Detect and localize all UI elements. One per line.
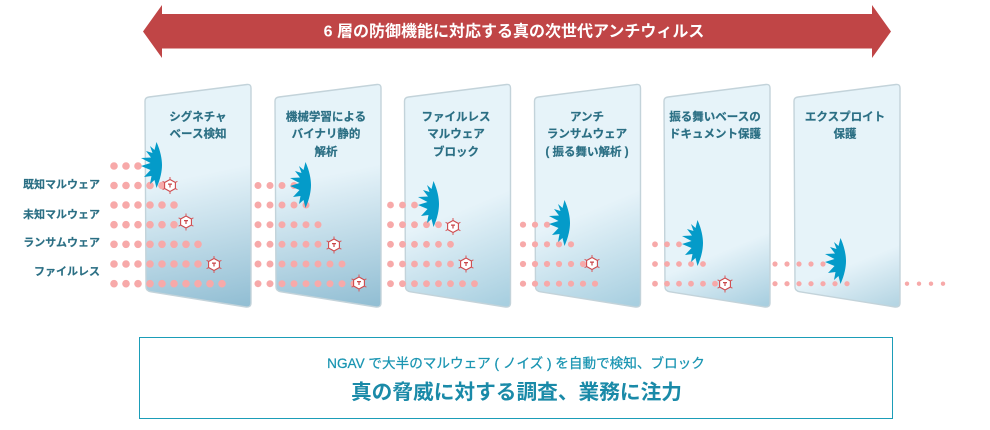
virus icons	[163, 177, 732, 292]
threat dots: passing through	[905, 282, 945, 286]
threat dots: before panel 5	[652, 241, 718, 287]
summary line 2: 真の脅威に対する調査、業務に注力	[351, 380, 682, 404]
panel 2: machine learning static analysis: バイナリ静的	[292, 126, 360, 140]
panel 4: anti-ransomware: ランサムウェア	[547, 128, 627, 140]
label: unknown malware: 未知マルウェア	[23, 207, 100, 221]
panel 3: fileless malware block	[404, 84, 510, 307]
panel 4: anti-ransomware	[534, 84, 640, 307]
panel 6: exploit protection: エクスプロイト	[805, 110, 885, 124]
panel 3: fileless malware block: ブロック	[433, 144, 479, 158]
panel 1: signature-based detection: シグネチャ	[169, 110, 227, 124]
panel 3: fileless malware block: マルウェア	[427, 128, 485, 140]
block burst: panel 1	[141, 142, 162, 188]
summary line 1: NGAV で大半のマルウェア ( ノイズ ) を自動で検知、ブロック	[327, 355, 705, 371]
panel 1: signature-based detection	[145, 84, 251, 307]
summary box	[140, 338, 892, 418]
icon: virus, past panel 5	[718, 276, 732, 292]
threat dots: before panel 4	[520, 222, 598, 287]
panel 2: machine learning static analysis: 機械学習による	[286, 110, 366, 124]
threat dots: before panel 1	[110, 162, 226, 288]
threat dots: before panel 6	[772, 261, 850, 286]
panel 2: machine learning static analysis	[275, 84, 381, 307]
panel 5: behavior-based document protection: ドキュメント保護	[669, 126, 761, 140]
panel 5: behavior-based document protection	[664, 84, 770, 307]
row labels	[23, 177, 100, 278]
block burst: panel 5	[682, 220, 703, 266]
icon: virus, known malware	[163, 177, 177, 194]
icon: virus, past panel 2 upper	[327, 236, 341, 254]
icon: virus, fileless	[207, 256, 221, 273]
banner title: 6 層の防御機能に対応する真の次世代アンチウィルス	[324, 22, 704, 40]
label: known malware: 既知マルウェア	[23, 177, 100, 191]
threat dots: before panel 2	[254, 182, 358, 287]
top banner: double-headed arrow	[143, 5, 891, 58]
block burst: panel 6	[825, 238, 846, 284]
panel 6: exploit protection: 保護	[834, 126, 857, 140]
icon: virus, past panel 3 upper	[446, 218, 460, 235]
threat dots: before panel 3	[387, 202, 478, 287]
icon: virus, unknown malware	[179, 214, 193, 230]
icon: virus, past panel 3 lower	[459, 256, 473, 272]
panel 4: anti-ransomware: ( 振る舞い解析 )	[545, 144, 629, 158]
panel 6: exploit protection	[794, 84, 900, 307]
icon: virus, past panel 2 lower	[352, 274, 366, 292]
label: ransomware: ランサムウェア	[23, 236, 100, 249]
label: fileless: ファイルレス	[34, 265, 100, 278]
icon: virus, past panel 4	[585, 255, 599, 272]
panel 4: anti-ransomware: アンチ	[570, 110, 604, 124]
panel 1: signature-based detection: ベース検知	[170, 126, 226, 140]
panel 5: behavior-based document protection: 振る舞いベースの	[669, 110, 761, 124]
panel 3: fileless malware block: ファイルレス	[422, 110, 490, 124]
block burst: panel 2	[290, 162, 311, 208]
panel 2: machine learning static analysis: 解析	[314, 144, 338, 158]
block burst: panel 3	[418, 181, 439, 227]
block burst: panel 4	[549, 200, 570, 246]
